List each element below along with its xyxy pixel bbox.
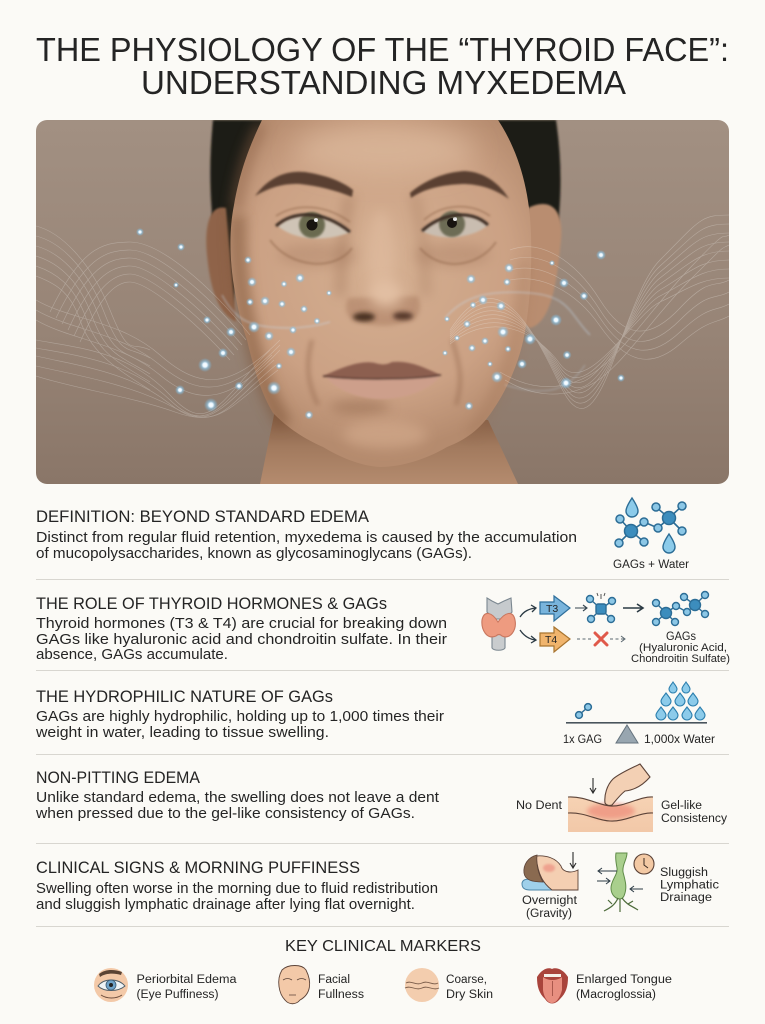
label: lymphatic: Sluggish [660,867,708,879]
marker: coarse dry skin [405,968,493,1002]
labels: scale [563,734,715,746]
body: hydrophilic: GAGs are highly hydrophilic, holding up to 1,000 times their [36,709,444,725]
label: GAGs types: Chondroitin Sulfate) [631,653,730,665]
T3 to broken molecule arrow [575,605,587,611]
label: Fullness [318,989,364,1001]
marker: periorbital edema [94,968,237,1002]
ears [206,208,236,322]
icon: water drops [656,682,705,720]
labels: dent and gel: Consistency [661,813,727,825]
icon: GAG molecule [652,592,708,626]
eyes [270,207,496,264]
icon: clock [634,854,654,874]
label [318,974,364,1001]
marker: enlarged tongue [537,968,672,1004]
icon: GAGs and water molecule [613,498,689,571]
label: GAGs types: (Hyaluronic Acid, [639,642,727,654]
face shading [236,125,524,449]
label [576,974,672,1001]
body: thyroid hormones: Thyroid hormones (T3 & T4) are crucial for breaking down [36,616,447,632]
body: definition [36,530,577,562]
label [446,974,493,1001]
body: clinical signs [36,881,438,913]
icon: eye [94,968,128,1002]
label: (Macroglossia) [576,989,656,1001]
arrow: press [590,778,596,793]
icon: skin [405,968,439,1002]
label: lymphatic [660,867,719,904]
label: GAGs + Water: GAGs + Water [613,559,689,571]
body: hydrophilic [35,709,444,741]
icon: face [279,966,310,1004]
label: Periorbital Edema [136,974,237,986]
body: definition: Distinct from regular fluid retention, myxedema is caused by the accumulation [36,530,577,546]
heading: thyroid hormones: THE ROLE OF THYROID HORMONES & GAGs [36,595,387,613]
section 4: non-pitting edema [35,769,439,822]
body: non-pitting: Unlike standard edema, the swelling does not leave a dent [36,790,439,806]
heading: clinical signs: CLINICAL SIGNS & MORNING PUFFINESS [36,859,360,877]
label: Coarse, [446,974,487,986]
face shape [230,120,531,467]
title: UNDERSTANDING MYXEDEMA [141,65,627,102]
label: lymphatic: Lymphatic [660,880,719,892]
arrow: T3: T3 [546,603,558,615]
icon: small GAG [576,704,591,718]
label: lymphatic: Drainage [660,892,712,904]
icon: tongue [537,968,568,1004]
heading: definition: DEFINITION: BEYOND STANDARD EDEMA [36,508,369,526]
label: overnight [522,895,578,920]
labels: scale: 1,000x Water [644,734,715,746]
body: thyroid hormones [36,616,447,663]
body: definition: of mucopolysaccharides, known as glycosaminoglycans (GAGs). [36,546,472,562]
hero photo: woman's face with blue particles and wave lines [36,120,729,484]
marker: facial fullness [279,966,364,1004]
body: non-pitting: when pressed due to the gel-like consistency of GAGs. [35,806,415,822]
diagram: thyroid hormone pathway [482,592,730,665]
labels: dent and gel: Gel-like [661,800,702,812]
labels: dent and gel [516,800,727,825]
body: hydrophilic: weight in water, leading to tissue swelling. [35,725,329,741]
label: GAGs types [631,631,730,665]
icon: person lying overnight [522,852,578,920]
icon: lymphatic drainage [597,853,719,912]
skin cross-section [568,797,653,832]
diagram: non-pitting skin press [516,764,727,832]
neck [260,410,518,484]
arrows from thyroid [520,605,536,643]
particle dots [136,228,625,420]
hair [210,120,561,310]
label: Facial [318,974,350,986]
body: thyroid hormones: GAGs like hyaluronic acid and chondroitin sulfate. In their [36,632,447,648]
body: clinical signs: and sluggish lymphatic drainage after lying flat overnight. [36,897,415,913]
icon: thyroid gland [482,598,515,650]
body: clinical signs: Swelling often worse in the morning due to fluid redistribution [36,881,438,897]
body: non-pitting [35,790,439,822]
section 5: clinical signs [36,859,438,913]
labels: scale: 1x GAG [563,734,602,746]
wave lines left [36,226,280,418]
label: Enlarged Tongue [576,974,672,986]
label: overnight: (Gravity) [526,908,572,920]
T4 blocked path [577,633,625,645]
arrow: T4: T4 [545,634,557,646]
icon: hand pressing [605,764,650,805]
label: (Eye Puffiness) [136,989,219,1001]
title [36,32,729,102]
section 3: hydrophilic nature [35,688,444,741]
arrow: T4 [540,627,570,652]
heading: hydrophilic: THE HYDROPHILIC NATURE OF GAGs [36,688,333,706]
body: thyroid hormones: absence, GAGs accumulate. [36,647,228,663]
title: THE PHYSIOLOGY OF THE “THYROID FACE”: [36,32,729,69]
heading: non-pitting: NON-PITTING EDEMA [36,769,200,787]
label [136,974,237,1001]
arrow: T3 [540,596,570,621]
label: Dry Skin [446,989,493,1001]
section 1: definition [36,508,577,562]
lips [323,362,441,399]
wave lines right [450,215,729,408]
section 2: thyroid hormones [36,595,447,663]
heading: key clinical markers: KEY CLINICAL MARKERS [285,938,481,955]
nose [346,281,420,326]
diagram: balance scale GAG vs water [563,682,715,746]
label: GAGs types: GAGs [666,631,696,643]
eyebrows [255,171,509,199]
label: overnight: Overnight [522,895,578,907]
labels: dent and gel: No Dent [516,800,563,812]
blue glow sweep [222,292,590,391]
arrow to GAGs [623,604,643,612]
icon: molecule breaking down [586,593,616,622]
